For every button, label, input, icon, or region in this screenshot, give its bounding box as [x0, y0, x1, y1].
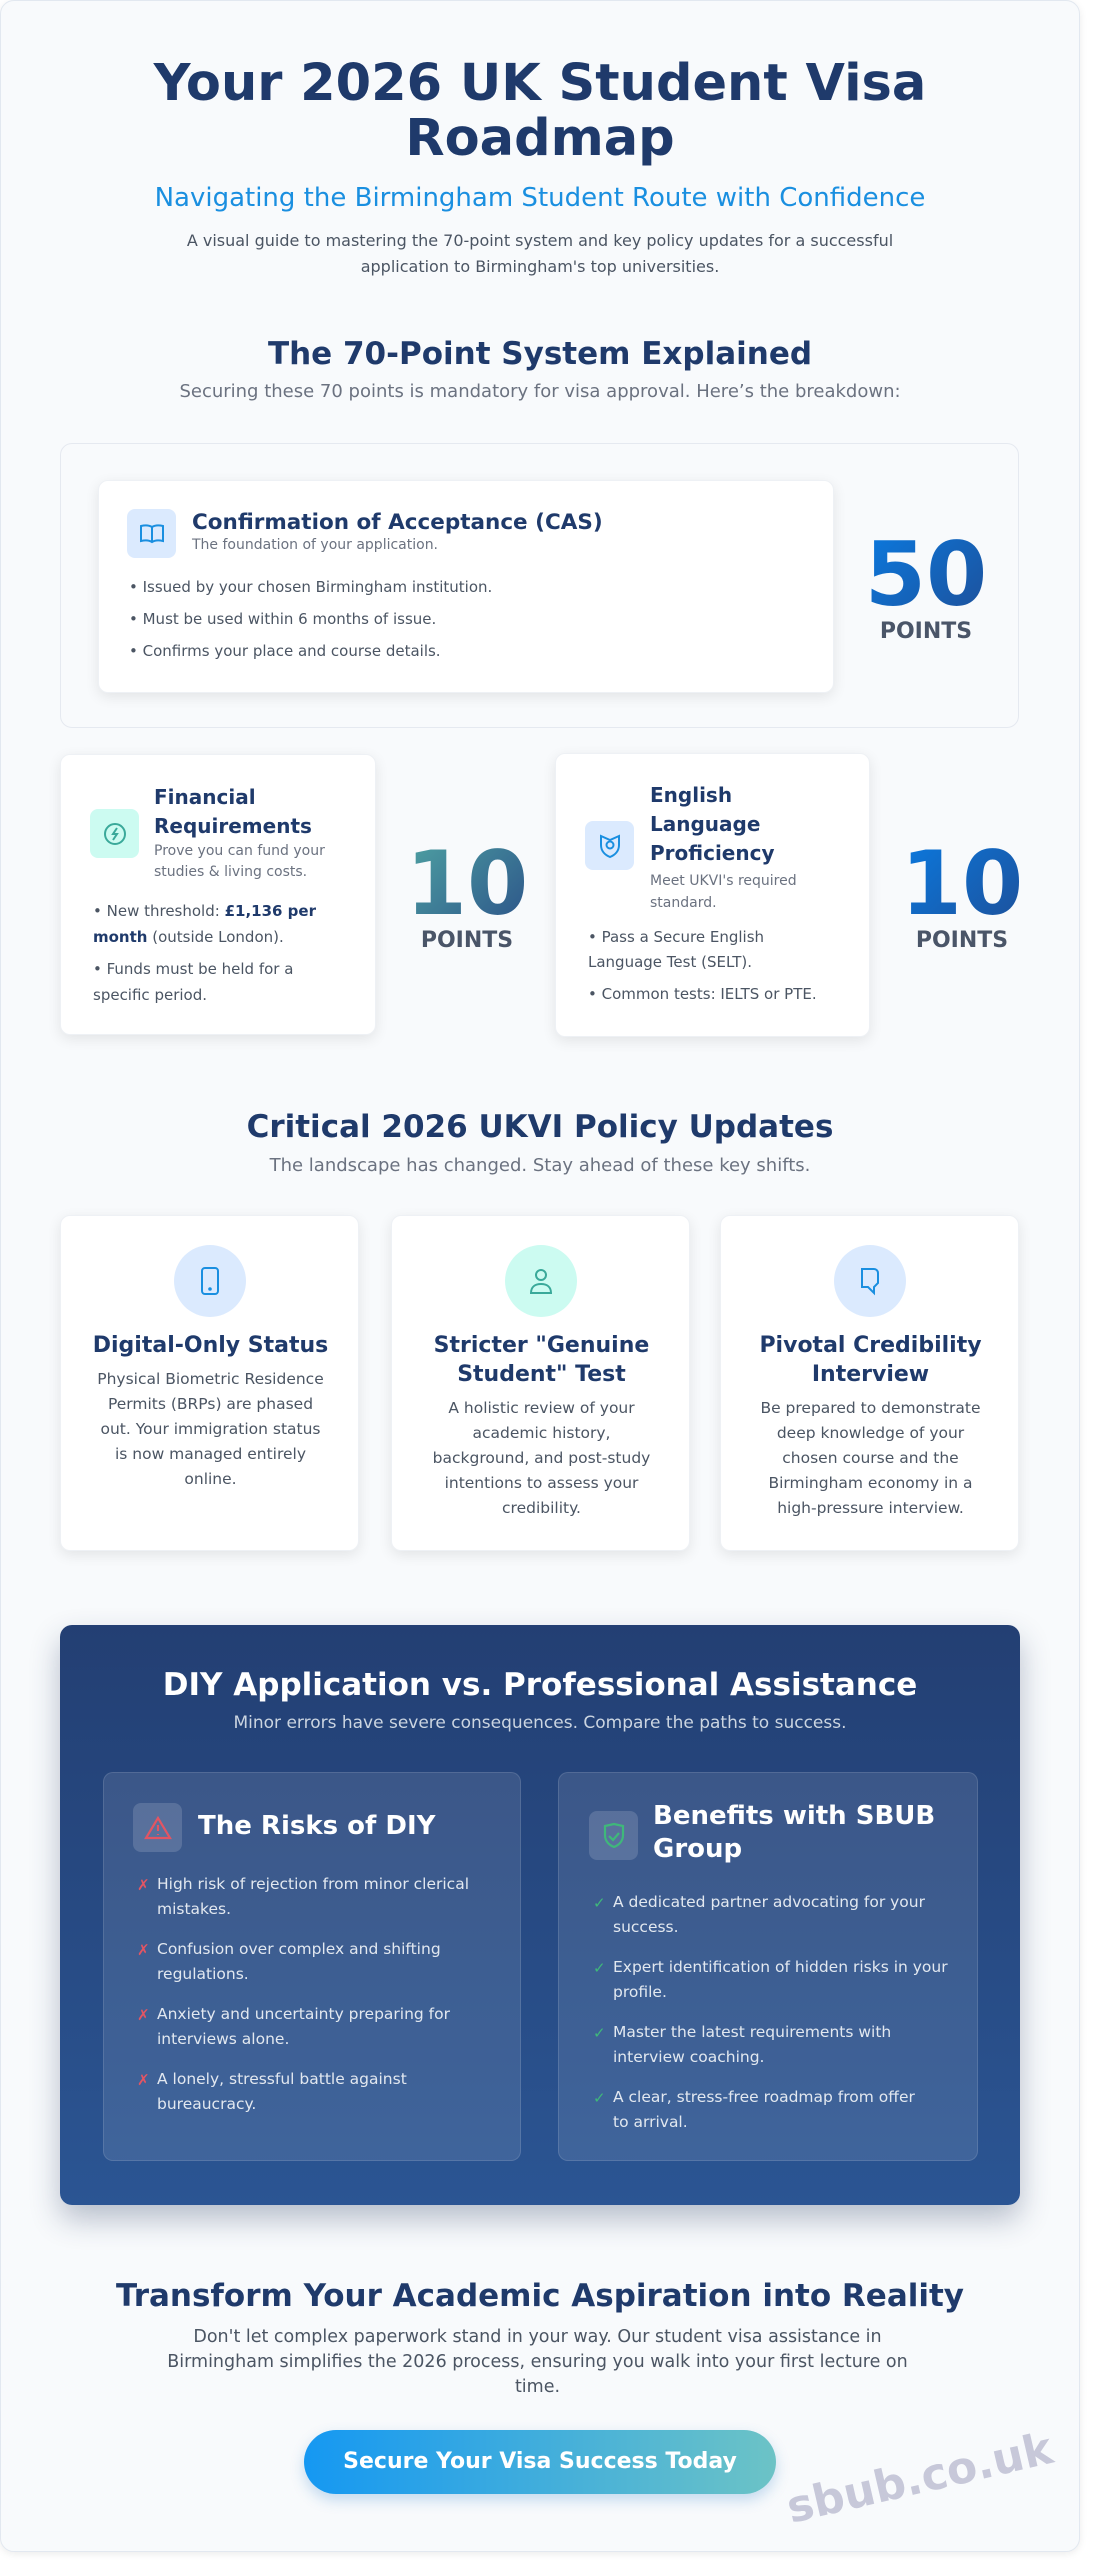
CAS bullets — [129, 578, 492, 660]
interview text — [759, 1333, 982, 1517]
points: 10 english: POINTS — [916, 928, 1008, 953]
icon: person — [505, 1245, 577, 1317]
title: Your 2026 UK Student Visa — [154, 54, 926, 113]
heading: 70-point system: The 70-Point System Explained — [268, 336, 812, 372]
points: 10 financial: POINTS — [421, 928, 513, 953]
english bullets — [588, 928, 817, 1003]
panel: CAS row — [60, 443, 1019, 728]
icon: book — [127, 509, 176, 558]
title — [153, 54, 926, 168]
card: risks of DIY: ✗ — [137, 2071, 150, 2089]
risks list: Confusion over complex and shifting regulations. — [157, 1940, 441, 1982]
card: CAS — [98, 480, 834, 693]
risks list — [137, 1875, 469, 2112]
points: 50: POINTS — [880, 619, 972, 644]
CAS heading: The foundation of your application. — [192, 537, 438, 553]
subheading: 70-point: Securing these 70 points is mandatory for visa approval. Here’s the breakdown: — [179, 381, 901, 402]
risks list: High risk of rejection from minor clerical mistakes. — [157, 1875, 469, 1918]
benefits list — [593, 1893, 948, 2130]
financial bullets — [93, 902, 316, 1004]
card: digital-only — [60, 1215, 359, 1551]
card: benefits SBUB: ✓ — [593, 2089, 606, 2107]
digital text: Digital-Only Status — [93, 1333, 328, 1358]
icon: speech — [834, 1245, 906, 1317]
points: 10 english: 10 — [901, 832, 1023, 935]
CAS bullets: • Must be used within 6 months of issue. — [129, 610, 436, 628]
english bullets: Language Test (SELT). — [588, 953, 752, 971]
interview text: Pivotal Credibility Interview — [759, 1333, 982, 1387]
watermark: sbub.co.uk — [782, 2423, 1057, 2534]
card: benefits SBUB: ✓ — [593, 1894, 606, 1912]
interview text: Be prepared to demonstrate deep knowledge of your chosen course and the Birmingham economy in a high-pressure interview. — [760, 1399, 981, 1517]
subheading: policy: The landscape has changed. Stay ahead of these key shifts. — [270, 1155, 810, 1176]
points: 50: 50 — [865, 523, 987, 626]
benefits list: A clear, stress-free roadmap from offer to arrival. — [613, 2088, 915, 2130]
card: risks of DIY: ✗ — [137, 1941, 150, 1959]
digital text: Physical Biometric Residence Permits (BRPs) are phased out. Your immigration status is now managed entirely online. — [97, 1370, 324, 1488]
financial bullets: • Funds must be held for a specific period. — [93, 960, 293, 1004]
button: CTA: Secure Your Visa Success Today — [343, 2449, 737, 2474]
card: risks of DIY: ✗ — [137, 1876, 150, 1894]
subtitle: Navigating the Birmingham Student Route with Confidence — [155, 183, 925, 213]
title: Roadmap — [405, 109, 675, 168]
financial heading: Financial Requirements — [154, 785, 312, 838]
financial heading: Prove you can fund your studies & living costs. — [154, 843, 325, 880]
icon: warning — [133, 1803, 182, 1852]
card: interview — [720, 1215, 1019, 1551]
heading: transform: Transform Your Academic Aspiration into Reality — [116, 2278, 964, 2314]
risks list: A lonely, stressful battle against bureaucracy. — [157, 2070, 407, 2112]
financial heading — [154, 785, 325, 880]
benefits list: Expert identification of hidden risks in your profile. — [613, 1958, 948, 2000]
english bullets: • Common tests: IELTS or PTE. — [588, 985, 817, 1003]
english heading — [650, 783, 797, 911]
icon: phone — [174, 1245, 246, 1317]
benefits list: Master the latest requirements with interview coaching. — [613, 2023, 891, 2066]
CAS bullets: • Confirms your place and course details. — [129, 642, 441, 660]
card: risks of DIY — [103, 1772, 521, 2161]
financial bullets: • New threshold: £1,136 per month (outside London). — [93, 902, 316, 946]
genuine text — [433, 1333, 650, 1517]
card: benefits SBUB — [558, 1772, 978, 2161]
icon: shield check — [589, 1811, 638, 1860]
DIY heading: DIY Application vs. Professional Assistance — [163, 1667, 917, 1703]
card: english — [555, 753, 870, 1037]
icon: coin — [90, 809, 139, 858]
card: benefits SBUB: ✓ — [593, 2024, 606, 2042]
card: risks of DIY: ✗ — [137, 2006, 150, 2024]
CAS heading: Confirmation of Acceptance (CAS) — [192, 510, 603, 535]
genuine text: A holistic review of your academic history, background, and post-study intentions to assess your credibility. — [433, 1399, 650, 1517]
card: genuine student — [391, 1215, 690, 1551]
closing text: Don't let complex paperwork stand in your way. Our student visa assistance in Birmingham simplifies the 2026 process, ensuring you walk into your first lecture on time. — [167, 2327, 908, 2397]
points: 10 financial: 10 — [406, 832, 528, 935]
DIY subheading: Minor errors have severe consequences. Compare the paths to success. — [233, 1713, 846, 1733]
button: CTA — [304, 2430, 776, 2494]
risks heading: The Risks of DIY — [198, 1811, 435, 1841]
risks list: Anxiety and uncertainty preparing for interviews alone. — [157, 2005, 450, 2048]
card: benefits SBUB: ✓ — [593, 1959, 606, 1977]
card: financial — [60, 754, 376, 1035]
CAS heading — [192, 510, 603, 553]
CAS bullets: • Issued by your chosen Birmingham institution. — [129, 578, 492, 596]
panel: DIY vs professional — [60, 1625, 1020, 2205]
english heading: English Language Proficiency — [650, 783, 774, 865]
heading: policy updates: Critical 2026 UKVI Policy Updates — [247, 1109, 833, 1145]
intro text: A visual guide to mastering the 70-point system and key policy updates for a successful application to Birmingham's top universities. — [187, 231, 893, 276]
benefits heading: Benefits with SBUB Group — [653, 1801, 935, 1864]
english heading: Meet UKVI's required standard. — [650, 873, 797, 911]
icon: shield — [585, 821, 634, 870]
english bullets: • Pass a Secure English — [588, 928, 764, 946]
genuine text: Stricter "Genuine — [434, 1333, 649, 1358]
benefits list: A dedicated partner advocating for your success. — [613, 1893, 925, 1936]
genuine text: Student" Test — [457, 1362, 626, 1387]
